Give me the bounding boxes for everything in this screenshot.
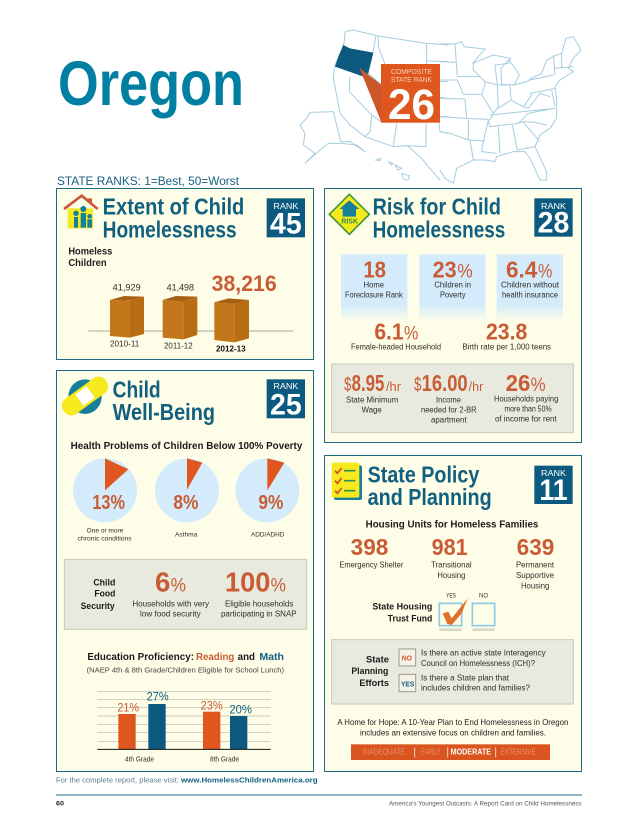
rank badge: RANK xyxy=(273,201,299,211)
progress scale: moderate: INADEQUATE xyxy=(363,748,405,757)
pie chart: chronic conditions 13%: One or more xyxy=(87,528,124,535)
heading: Well-Being xyxy=(113,399,215,425)
state housing trust fund checkboxes: NO xyxy=(479,594,488,600)
panel: state planning efforts: Council on Homelessness (ICH)? xyxy=(421,658,535,668)
panel: housing affordability: 16.00 xyxy=(422,370,468,396)
stat: teen birth rate xyxy=(462,318,551,351)
stat: permanent supportive housing: 639 xyxy=(517,534,554,560)
heading: and Planning xyxy=(368,484,492,510)
bar chart: education proficiency: 4th Grade xyxy=(125,757,154,764)
subheading: education proficiency: and xyxy=(238,652,255,663)
heading xyxy=(103,193,244,243)
stat: children without health insurance: 6.4 xyxy=(506,257,537,283)
panel: state planning efforts: includes children and families? xyxy=(421,683,530,693)
pie chart: asthma 8%: 8% xyxy=(173,492,199,514)
pie chart: ADD/ADHD 9%: ADD/ADHD xyxy=(251,532,285,539)
panel: housing affordability: % xyxy=(531,375,546,396)
subheading: education proficiency: Education Proficiency: xyxy=(87,652,194,663)
bar chart: homeless children by year: 41,498 xyxy=(167,282,194,292)
callout: composite state rank: 26 xyxy=(388,81,435,129)
progress scale: moderate: EXTENSIVE xyxy=(501,748,536,757)
panel: housing affordability: more than 50% xyxy=(504,405,552,414)
stat: children without health insurance xyxy=(497,254,563,322)
panel: housing affordability: 8.95 xyxy=(352,370,384,396)
stat: children in poverty: Poverty xyxy=(440,291,466,300)
heading: Extent of Child xyxy=(103,193,244,219)
rank badge: RANK xyxy=(273,381,299,391)
stat: children without health insurance: % xyxy=(538,262,552,283)
rank badge: RANK xyxy=(541,201,566,211)
stat: emergency shelter: Emergency Shelter xyxy=(339,561,404,570)
panel: state planning efforts: Is there an active state Interagency xyxy=(421,648,546,658)
panel: housing affordability: /hr xyxy=(386,379,402,394)
text: ten-year plan: A Home for Hope: A 10-Year Plan to End Homelessness in Oregon xyxy=(337,717,568,727)
pie chart: ADD/ADHD 9% xyxy=(235,458,299,539)
stat: home foreclosure rank xyxy=(341,254,407,322)
panel: child food security: % xyxy=(271,576,286,597)
bar chart: homeless children by year: 2012-13 xyxy=(216,345,246,354)
stat: female-headed household: % xyxy=(404,323,418,344)
pie chart: ADD/ADHD 9%: 9% xyxy=(258,492,284,514)
panel: housing affordability: $ xyxy=(414,375,422,396)
rank badge xyxy=(267,379,305,421)
stat: transitional housing: Transitional xyxy=(431,561,472,570)
heading: Homelessness xyxy=(103,217,237,243)
bar chart: homeless children by year xyxy=(110,271,277,354)
page number: 60 xyxy=(56,801,64,808)
heading xyxy=(368,462,492,510)
text: ten-year plan xyxy=(337,717,568,738)
panel: state planning efforts: Is there a State plan that xyxy=(421,673,510,683)
stat: home foreclosure rank: 18 xyxy=(363,257,386,283)
stat: female-headed household: 6.1 xyxy=(374,318,404,344)
stat: permanent supportive housing: Supportive xyxy=(516,571,555,580)
state housing trust fund checkboxes: YES xyxy=(446,594,456,600)
legend: state ranks: STATE RANKS: 1=Best, 50=Worst xyxy=(57,174,240,188)
subheading: education proficiency: (NAEP 4th & 8th Grade/Children Eligible for School Lunch) xyxy=(87,665,284,674)
stat: teen birth rate: 23.8 xyxy=(486,318,527,344)
panel: child food security: low food security xyxy=(140,610,201,619)
panel: housing affordability: apartment xyxy=(431,415,467,424)
subheading: health problems: Health Problems of Children Below 100% Poverty xyxy=(71,441,303,452)
stat: permanent supportive housing: Permanent xyxy=(516,561,555,570)
text: homeless children: Children xyxy=(68,258,107,269)
stat: teen birth rate: Birth rate per 1,000 teens xyxy=(462,342,551,351)
footer: report link xyxy=(56,776,318,785)
pie chart: chronic conditions 13%: 13% xyxy=(92,492,125,514)
panel: child food security: Food xyxy=(94,589,116,599)
stat: emergency shelter: 398 xyxy=(351,534,388,560)
rank badge xyxy=(534,466,573,507)
panel: state policy and planning xyxy=(324,456,582,808)
stat: children without health insurance: Children without xyxy=(501,281,560,290)
panel: housing affordability: /hr xyxy=(469,379,484,394)
footer: report link: For the complete report, please visit: xyxy=(56,776,179,785)
stat: female-headed household: Female-headed Household xyxy=(351,342,441,351)
heading xyxy=(373,193,505,243)
panel: housing affordability xyxy=(332,364,573,433)
title: Oregon xyxy=(58,49,244,119)
heading: Child xyxy=(113,377,161,403)
panel: housing affordability: needed for 2-BR xyxy=(421,406,477,415)
panel: state planning efforts: Planning xyxy=(351,666,388,676)
panel: housing affordability: Households paying xyxy=(494,395,558,404)
icon: risk diamond: RISK xyxy=(341,217,358,226)
map of the United States xyxy=(300,30,581,183)
rank badge: 25 xyxy=(270,388,302,421)
panel: housing affordability: 26 xyxy=(506,370,530,396)
panel: state planning efforts: NO xyxy=(402,654,412,663)
state housing trust fund checkboxes: Trust Fund xyxy=(388,613,432,623)
panel: child food security: Households with very xyxy=(132,600,209,609)
stat: transitional housing xyxy=(431,534,472,580)
icon: risk diamond xyxy=(329,194,369,234)
panel: child food security: Child xyxy=(93,578,116,588)
stat: children in poverty: % xyxy=(457,262,473,283)
heading: Homelessness xyxy=(373,217,505,243)
rank badge xyxy=(534,198,573,240)
heading: State Policy xyxy=(368,462,480,488)
callout: composite state rank xyxy=(359,64,440,129)
panel: housing affordability: $ xyxy=(344,375,352,396)
callout: composite state rank: COMPOSITE xyxy=(391,69,432,76)
subheading: education proficiency xyxy=(87,652,284,674)
panel: child food security: Eligible households xyxy=(225,600,293,609)
stat: transitional housing: Housing xyxy=(437,571,465,580)
stat: children in poverty: 23 xyxy=(433,257,457,283)
pie chart: asthma 8%: Asthma xyxy=(175,532,198,539)
callout: composite state rank: STATE RANK xyxy=(391,77,432,84)
panel: risk for child homelessness xyxy=(324,188,582,442)
bar chart: education proficiency: 21% xyxy=(117,700,139,714)
text: ten-year plan: includes an extensive focus on children and families. xyxy=(360,728,546,738)
state housing trust fund checkboxes: State Housing xyxy=(372,601,432,611)
subheading: housing units: Housing Units for Homeless Families xyxy=(366,520,538,531)
icon: house with family xyxy=(64,196,98,228)
stat: home foreclosure rank: Foreclosure Rank xyxy=(345,291,403,300)
panel: state planning efforts: YES xyxy=(401,680,414,689)
panel: child food security: % xyxy=(171,576,186,597)
text: homeless children xyxy=(68,246,112,269)
subheading: education proficiency: Reading xyxy=(196,652,234,663)
text: homeless children: Homeless xyxy=(68,246,112,257)
bar chart: education proficiency: 23% xyxy=(201,698,223,712)
panel: child well-being xyxy=(56,370,318,808)
panel: child food security: participating in SNAP xyxy=(221,610,297,619)
panel: child food security: 100 xyxy=(225,567,270,598)
panel: housing affordability: Wage xyxy=(362,406,382,415)
icon: Oregon state highlighted xyxy=(335,45,373,77)
icon: checklist xyxy=(332,463,362,500)
bar chart: education proficiency: 27% xyxy=(147,690,169,704)
stat: transitional housing: 981 xyxy=(432,534,468,560)
bar chart: homeless children by year: 38,216 xyxy=(212,271,277,296)
stat: children in poverty xyxy=(419,254,486,322)
progress scale: moderate xyxy=(351,744,550,760)
panel: housing affordability: Income xyxy=(436,396,462,405)
pie chart: chronic conditions 13% xyxy=(73,458,137,543)
icon: bandage xyxy=(58,373,112,419)
progress scale: moderate: EARLY xyxy=(421,748,441,757)
rank badge: 28 xyxy=(538,207,569,240)
stat: children in poverty: Children in xyxy=(434,281,471,290)
panel: state planning efforts: Efforts xyxy=(359,678,389,688)
state housing trust fund checkboxes xyxy=(372,594,495,631)
bar chart: education proficiency xyxy=(97,690,271,764)
rank badge: 11 xyxy=(539,474,568,507)
pie chart: asthma 8% xyxy=(155,458,219,539)
panel: extent of child homelessness xyxy=(56,188,314,360)
bar chart: homeless children by year: 2011-12 xyxy=(164,342,193,351)
stat: emergency shelter xyxy=(339,534,404,570)
stat: home foreclosure rank: Home xyxy=(364,281,385,290)
panel: state planning efforts: State xyxy=(366,655,389,665)
pie chart: chronic conditions 13%: chronic conditions xyxy=(78,536,132,543)
bar chart: homeless children by year: 2010-11 xyxy=(110,340,140,349)
panel: state planning efforts xyxy=(332,640,573,704)
rank badge xyxy=(267,198,305,240)
panel: child food security: Security xyxy=(81,601,115,611)
panel: child food security xyxy=(64,559,307,629)
footer: publication title: America's Youngest Outcasts: A Report Card on Child Homelessness xyxy=(389,801,582,808)
bar chart: education proficiency: 20% xyxy=(229,702,252,716)
subheading: education proficiency: Math xyxy=(259,652,284,663)
footer: report link: www.HomelessChildrenAmerica.org xyxy=(180,776,318,785)
stat: female-headed household xyxy=(351,318,441,351)
panel: child food security: 6 xyxy=(155,567,170,598)
rank badge: RANK xyxy=(541,468,566,478)
bar chart: homeless children by year: 41,929 xyxy=(113,282,141,292)
panel: housing affordability: of income for rent xyxy=(495,415,557,424)
bar chart: education proficiency: 8th Grade xyxy=(210,757,239,764)
heading: Risk for Child xyxy=(373,193,501,219)
panel: housing affordability: State Minimum xyxy=(346,396,399,405)
stat: permanent supportive housing xyxy=(516,534,555,591)
stat: children without health insurance: health insurance xyxy=(502,291,559,300)
stat: permanent supportive housing: Housing xyxy=(521,582,549,591)
heading xyxy=(113,377,215,425)
progress scale: moderate: MODERATE xyxy=(451,748,492,757)
rank badge: 45 xyxy=(270,207,302,240)
